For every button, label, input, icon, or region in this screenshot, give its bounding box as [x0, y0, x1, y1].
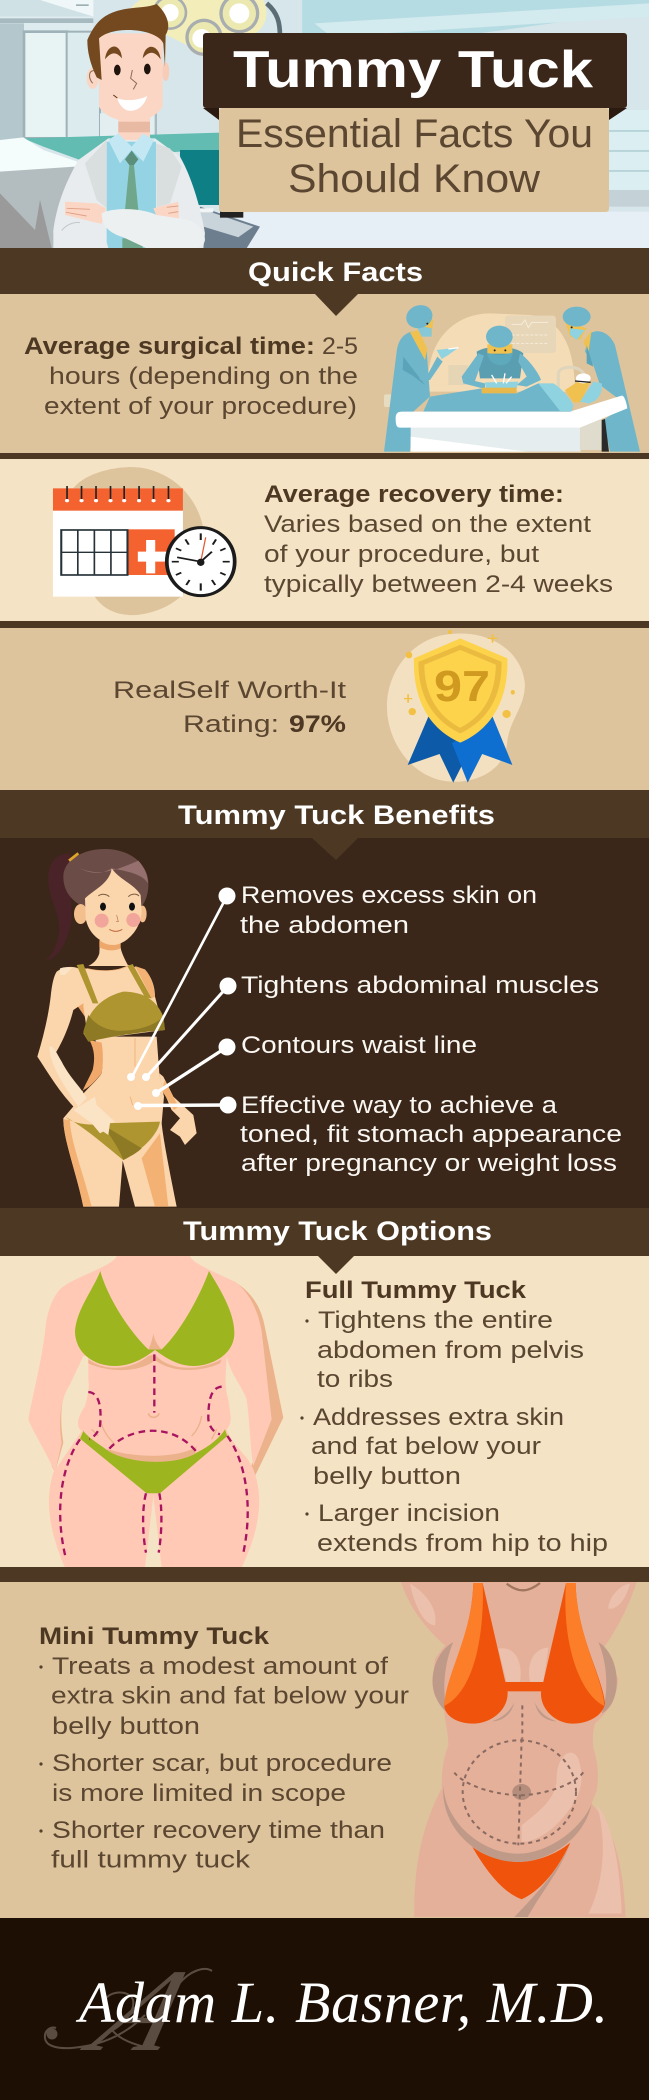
- icon: rating badge: 97: [434, 662, 490, 711]
- subtitle: Should Know: [288, 157, 540, 201]
- text: benefits list: Tightens abdominal muscles: [241, 972, 599, 999]
- heading: quick facts: [0, 248, 649, 316]
- text: full tummy tuck: Tightens the entire: [318, 1307, 553, 1334]
- text: mini tummy tuck: Shorter scar, but procedure: [52, 1750, 392, 1777]
- text: full tummy tuck: belly button: [313, 1463, 461, 1490]
- title box: [203, 33, 627, 212]
- panel: realself rating: [0, 628, 649, 790]
- text: mini tummy tuck: belly button: [52, 1713, 200, 1740]
- subtitle: Essential Facts You: [236, 112, 593, 156]
- panel: recovery time: [0, 459, 649, 621]
- callout lines: [127, 888, 236, 1114]
- text: average surgical time: hours (depending on the: [49, 363, 358, 390]
- text: full tummy tuck: to ribs: [317, 1366, 393, 1393]
- text: benefits list: Removes excess skin on: [241, 882, 537, 909]
- title: Tummy Tuck: [233, 41, 593, 99]
- logo monogram: A: [63, 1945, 225, 2076]
- mini tuck body illustration: [401, 1582, 637, 1917]
- icon: rating badge: [387, 630, 525, 783]
- text: mini tummy tuck: Mini Tummy Tuck: [39, 1623, 269, 1650]
- text: mini tummy tuck: Treats a modest amount of: [52, 1653, 388, 1680]
- subtitle: [236, 112, 593, 201]
- logo wordmark: Adam L. Basner, M.D.: [75, 1970, 608, 2035]
- text: benefits list: Effective way to achieve a: [241, 1092, 557, 1119]
- panel: mini tummy tuck: [0, 1582, 649, 1918]
- icon: surgical lamp: [132, 0, 280, 56]
- text: average recovery time: Average recovery time:: [264, 481, 564, 508]
- text: benefits list: [240, 882, 622, 1177]
- text: benefits list: after pregnancy or weight loss: [241, 1150, 617, 1177]
- heading: options: [0, 1208, 649, 1274]
- text: full tummy tuck: extends from hip to hip: [317, 1530, 608, 1557]
- panel: footer logo: [0, 1918, 649, 2100]
- panel: benefits: [0, 838, 649, 1208]
- text: mini tummy tuck: extra skin and fat below your: [51, 1682, 409, 1710]
- surgery illustration: [384, 301, 640, 452]
- text: benefits list: the abdomen: [240, 912, 409, 939]
- heading: options: Tummy Tuck Options: [183, 1216, 492, 1246]
- panel: quick facts surgical time: [0, 294, 649, 453]
- text: benefits list: toned, fit stomach appearance: [240, 1121, 622, 1148]
- heading: benefits: [0, 790, 649, 860]
- text: average recovery time: Varies based on the extent: [264, 511, 591, 538]
- text: full tummy tuck: Full Tummy Tuck: [305, 1277, 526, 1304]
- panel: header scene: [0, 0, 649, 248]
- text: average recovery time: of your procedure, but: [264, 541, 539, 568]
- text: full tummy tuck: Addresses extra skin: [313, 1404, 564, 1431]
- text: full tummy tuck: [300, 1277, 608, 1557]
- text: average surgical time: 2-5: [322, 333, 358, 360]
- text: average recovery time: typically between 2-4 weeks: [264, 571, 613, 598]
- text: full tummy tuck: abdomen from pelvis: [317, 1337, 584, 1364]
- heading: quick facts: Quick Facts: [248, 257, 423, 287]
- text: average surgical time: extent of your procedure): [44, 393, 357, 420]
- text: realself worth-it rating: Rating:: [183, 711, 279, 738]
- text: mini tummy tuck: is more limited in scope: [52, 1780, 346, 1807]
- text: average recovery time: [264, 481, 613, 598]
- doctor illustration: [53, 4, 205, 248]
- text: full tummy tuck: and fat below your: [311, 1433, 541, 1460]
- text: average surgical time: [24, 333, 358, 420]
- text: benefits list: Contours waist line: [241, 1032, 477, 1059]
- text: realself worth-it rating: [113, 677, 346, 738]
- text: realself worth-it rating: RealSelf Worth-It: [113, 677, 346, 704]
- text: mini tummy tuck: full tummy tuck: [51, 1846, 251, 1874]
- full tuck body illustration: [28, 1256, 283, 1568]
- panel: full tummy tuck: [0, 1256, 649, 1568]
- heading: benefits: Tummy Tuck Benefits: [178, 800, 495, 830]
- text: average surgical time: Average surgical time:: [24, 333, 315, 360]
- text: mini tummy tuck: Shorter recovery time than: [52, 1817, 385, 1844]
- icon: calendar and clock: [53, 467, 235, 615]
- text: full tummy tuck: Larger incision: [318, 1500, 500, 1527]
- text: mini tummy tuck: [39, 1623, 409, 1874]
- text: realself worth-it rating: 97%: [289, 711, 346, 738]
- woman illustration: [37, 849, 197, 1207]
